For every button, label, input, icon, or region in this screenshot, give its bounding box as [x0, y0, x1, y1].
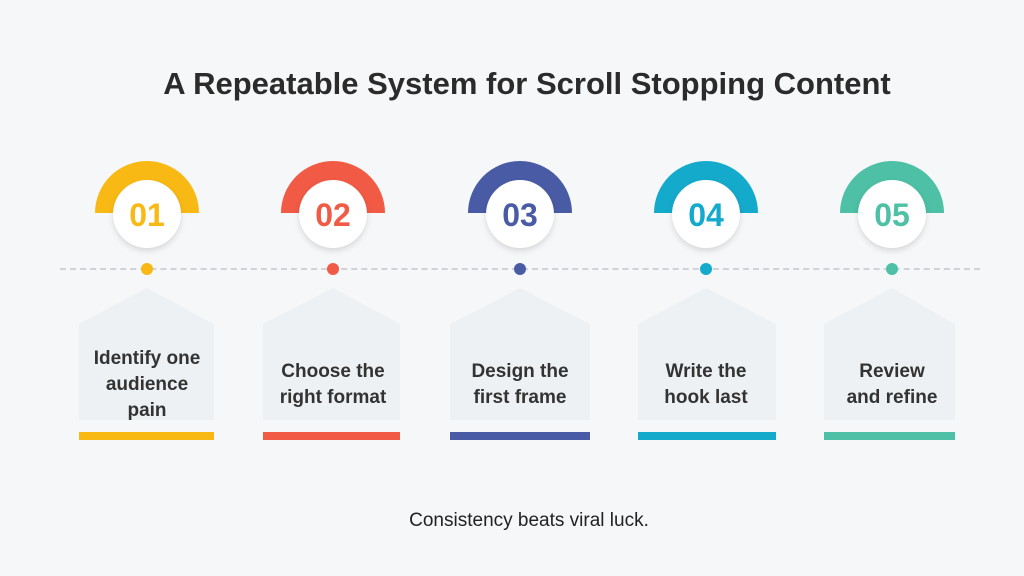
text 5	[847, 361, 937, 408]
text 5: and refine	[847, 387, 937, 408]
title: A Repeatable System for Scroll Stopping Content	[163, 66, 891, 101]
step 5: 05	[874, 197, 910, 233]
step 4: 04	[688, 197, 724, 233]
step 3: 03	[502, 197, 538, 233]
text 3: first frame	[474, 387, 566, 408]
text 3: Design the	[471, 361, 569, 382]
step 3	[450, 161, 590, 440]
text 4	[664, 361, 748, 408]
step 2	[263, 161, 400, 440]
step 1	[79, 161, 214, 440]
step 2: 02	[315, 197, 351, 233]
text 4: hook last	[664, 387, 748, 408]
text 2: right format	[280, 387, 386, 408]
step 5	[824, 161, 955, 440]
step 1: 01	[129, 197, 165, 233]
step 4	[638, 161, 776, 440]
text 1: Identify one	[94, 348, 200, 369]
text 3	[471, 361, 569, 408]
text 4: Write the	[666, 361, 746, 382]
text 2: Choose the	[281, 361, 385, 382]
text 2	[280, 361, 386, 408]
text 1: pain	[127, 400, 167, 421]
footer: Consistency beats viral luck.	[409, 510, 649, 531]
text 1	[94, 348, 200, 421]
text 1: audience	[106, 374, 188, 395]
text 5: Review	[859, 361, 925, 382]
